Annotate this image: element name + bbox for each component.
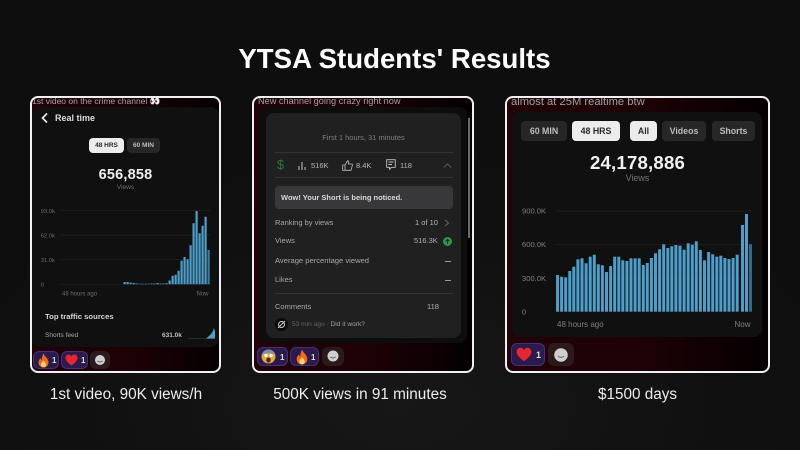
reaction: add	[90, 351, 110, 369]
collapse chevron	[444, 164, 452, 168]
scrollbar	[468, 118, 470, 238]
stat: like icon	[342, 160, 353, 171]
reaction: fire: 1	[311, 353, 315, 362]
chart: first video views: 62.0k	[41, 234, 55, 240]
chart: channel views: 300.0K	[522, 274, 546, 283]
views total: 656,858	[99, 167, 152, 183]
message text: 1st video on the crime channel 👀	[32, 96, 160, 106]
chart: first video views: 0	[41, 282, 44, 288]
dash	[445, 280, 451, 281]
heading real time: Real time	[55, 113, 95, 123]
notice banner	[275, 186, 453, 209]
avatar	[275, 318, 288, 331]
ranking chevron	[444, 220, 449, 226]
reaction: add	[548, 343, 574, 366]
reaction: heart: 1	[81, 356, 85, 365]
row: average percentage: Average percentage viewed	[275, 256, 369, 265]
row: views: Views	[275, 236, 295, 245]
comments value: 118	[427, 302, 439, 311]
title: YTSA Students' Results	[238, 43, 551, 74]
row: ranking: Ranking by views	[275, 218, 333, 227]
row: comments: Comments	[275, 302, 311, 311]
dollar icon: $	[277, 158, 284, 172]
toggle 48 hrs: 48 HRS	[581, 126, 611, 136]
chart: channel views: Now	[734, 320, 751, 329]
toggle 48 hrs	[89, 138, 124, 153]
stat: comment icon	[386, 159, 396, 170]
views label: Views	[626, 173, 649, 183]
toggle 60 min	[127, 138, 160, 153]
timestamp: 53 min ago · Did it work?	[292, 321, 365, 328]
inner analytics panel	[512, 112, 762, 337]
dark backing panel	[259, 107, 467, 343]
stat: views: 516K	[311, 161, 329, 170]
notice banner: Wow! Your Short is being noticed.	[281, 193, 402, 202]
filter all: All	[638, 126, 649, 136]
filter videos: Videos	[670, 126, 698, 136]
filter all	[630, 121, 657, 141]
filter videos	[662, 121, 706, 141]
up arrow badge	[443, 237, 452, 246]
chart: first video views	[41, 209, 210, 298]
toggle 60 min: 60 MIN	[133, 142, 154, 149]
stat: comments: 118	[400, 161, 412, 170]
toggle 48 hrs: 48 HRS	[95, 142, 118, 149]
reaction: fire	[33, 351, 59, 369]
panel: almost 25M	[505, 96, 770, 373]
caption: 500K views: 500K views in 91 minutes	[273, 386, 447, 403]
views total: 24,178,886	[590, 152, 685, 173]
traffic row value: 631.0k	[162, 332, 182, 339]
chart: channel views: 48 hours ago	[557, 320, 604, 329]
inner analytics panel	[32, 107, 219, 347]
stat: likes: 8.4K	[356, 161, 371, 170]
traffic row label: Shorts feed	[45, 332, 78, 339]
reaction: add	[322, 347, 344, 366]
stats panel	[266, 113, 461, 338]
toggle 60 min: 60 MIN	[530, 126, 558, 136]
reaction: shocked: 1	[280, 353, 284, 362]
reaction: heart	[511, 343, 545, 366]
chart: first video views: 93.0k	[41, 209, 55, 215]
reaction: heart	[61, 351, 88, 369]
ranking value: 1 of 10	[415, 218, 438, 227]
toggle 48 hrs	[572, 121, 620, 141]
stat: view bars icon	[298, 162, 306, 170]
views value: 516.3K	[414, 236, 438, 245]
reaction: fire: 1	[52, 356, 56, 365]
dash	[445, 261, 451, 262]
chart: channel views	[522, 206, 752, 329]
reaction: heart: 1	[536, 350, 541, 360]
chart: first video views: 48 hours ago	[62, 292, 98, 298]
panel: new channel stats	[252, 96, 474, 373]
toggle 60 min	[521, 121, 567, 141]
message text: New channel going crazy right now	[258, 96, 400, 106]
back arrow	[42, 112, 48, 124]
period text: First 1 hours, 31 minutes	[322, 133, 405, 142]
views label: Views	[117, 184, 134, 191]
chart: first video views: 31.0k	[41, 258, 55, 264]
filter shorts	[712, 121, 755, 141]
panel: first video real time	[30, 96, 221, 373]
caption: first video: 1st video, 90K views/h	[50, 386, 202, 403]
row: likes: Likes	[275, 275, 293, 284]
chart: channel views: 900.0K	[522, 206, 546, 216]
caption: $1500 days: $1500 days	[598, 386, 677, 403]
filter shorts: Shorts	[720, 126, 747, 136]
traffic sparkline	[188, 328, 215, 339]
chart: channel views: 0	[522, 308, 526, 316]
chart: first video views: Now	[196, 292, 209, 298]
message text: almost at 25M realtime btw	[511, 96, 645, 108]
reaction: fire	[290, 347, 319, 366]
traffic heading: Top traffic sources	[45, 312, 114, 321]
chart: channel views: 600.0K	[522, 240, 546, 249]
reaction: shocked	[257, 347, 288, 366]
